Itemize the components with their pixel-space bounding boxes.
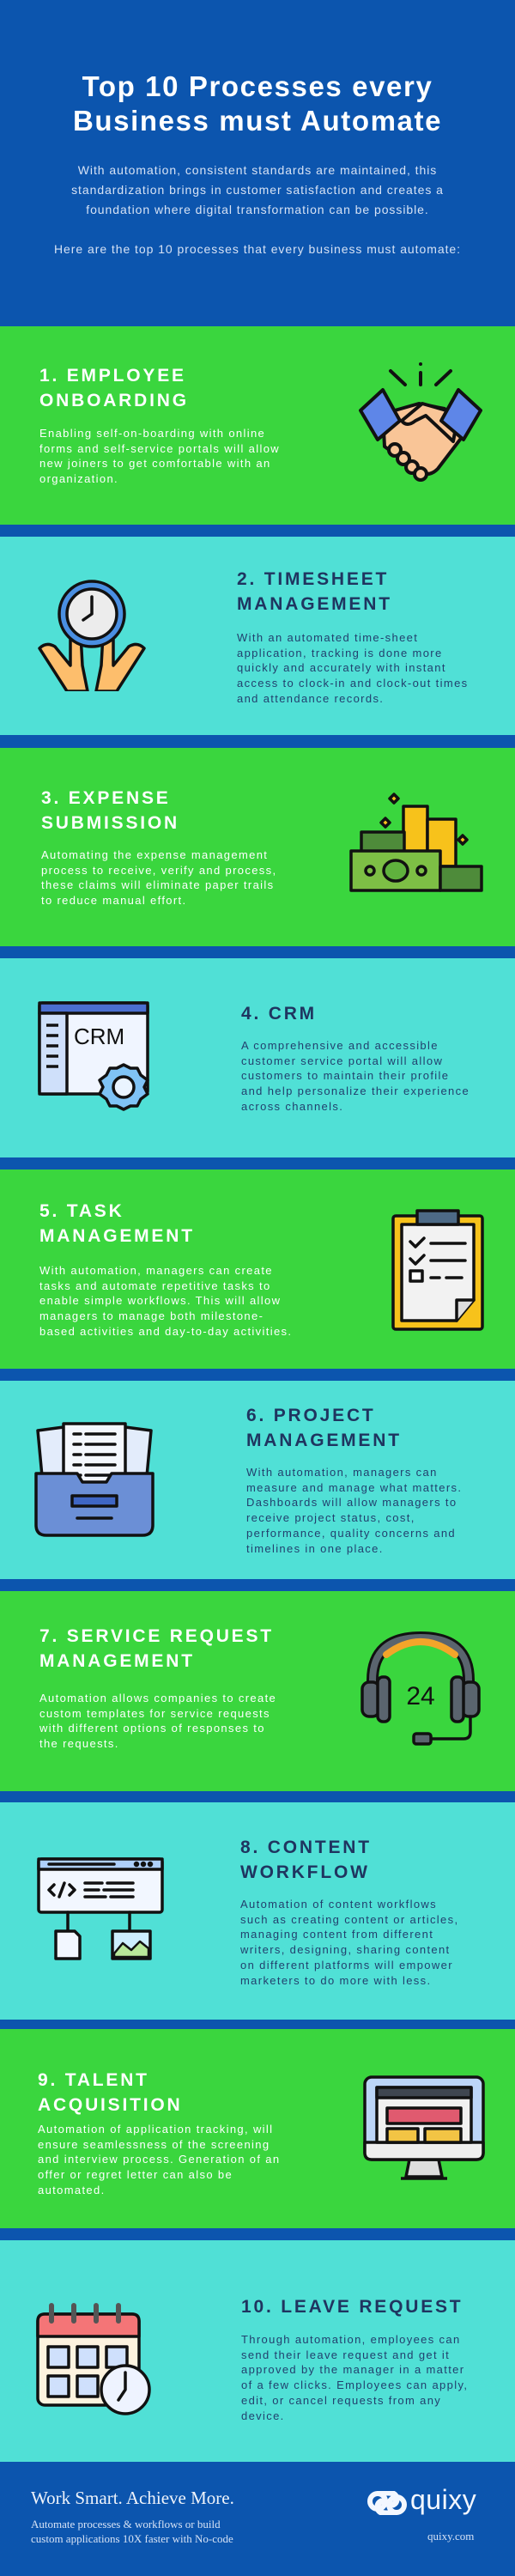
icon: code window with assets	[37, 1857, 164, 1960]
section 8: content workflow	[0, 1802, 515, 2020]
text: approved by the manager in a matter	[241, 2363, 464, 2376]
text: Enabling self-on-boarding with online	[39, 427, 265, 440]
text: Automation of content workflows	[240, 1898, 437, 1911]
text: across channels.	[241, 1100, 343, 1113]
icon: clipboard checklist	[391, 1209, 484, 1331]
icon: clock in hands	[38, 580, 146, 691]
text: receive project status, cost,	[246, 1511, 415, 1524]
icon: monitor	[363, 2075, 485, 2180]
section 6: project management	[0, 1381, 515, 1579]
heading	[39, 366, 189, 410]
section 9: talent acquisition	[0, 2029, 515, 2228]
icon: money and coins	[349, 793, 483, 892]
text: offer or regret letter can also be	[38, 2168, 233, 2181]
text: A comprehensive and accessible	[241, 1039, 439, 1052]
text: organization.	[39, 472, 118, 485]
heading: 9. TALENT	[38, 2070, 149, 2090]
text: ensure seamlessness of the screening	[38, 2138, 270, 2151]
logo: quixy: quixy	[410, 2484, 476, 2515]
icon: handshake	[359, 362, 482, 482]
section 1: employee onboarding	[0, 326, 515, 525]
text: of a few clicks. Employees can apply,	[241, 2379, 468, 2391]
text: access to clock-in and clock-out times	[237, 677, 469, 690]
text: and interview process. Generation of an	[38, 2153, 280, 2166]
heading: MANAGEMENT	[246, 1431, 402, 1450]
intro text: standardization brings in customer satisfaction and creates a	[71, 183, 444, 197]
text	[39, 1692, 276, 1750]
text	[237, 631, 469, 705]
text: based activities and day-to-day activities.	[39, 1325, 292, 1338]
text: Dashboards will allow managers to	[246, 1496, 457, 1509]
heading: SUBMISSION	[41, 813, 179, 833]
text: With automation, managers can	[246, 1466, 438, 1479]
text: send their leave request and get it	[241, 2348, 450, 2361]
section 4: CRM	[0, 958, 515, 1157]
section 3: expense submission	[0, 748, 515, 946]
icon: CRM window	[38, 1001, 149, 1111]
heading: 4. CRM	[241, 1004, 317, 1024]
heading	[246, 1406, 402, 1450]
heading: 6. PROJECT	[246, 1406, 376, 1425]
intro text: foundation where digital transformation can be possible.	[86, 203, 429, 216]
heading: MANAGEMENT	[39, 1651, 195, 1671]
text: With automation, managers can create	[39, 1264, 273, 1277]
heading: WORKFLOW	[240, 1862, 370, 1882]
text: the requests.	[39, 1737, 119, 1750]
text: these claims will eliminate paper trails	[41, 878, 274, 891]
heading: MANAGEMENT	[237, 594, 392, 614]
text	[39, 1264, 292, 1338]
text: and attendance records.	[237, 692, 384, 705]
text: application, tracking is done more	[237, 647, 443, 659]
text: Automation allows companies to create	[39, 1692, 276, 1704]
text: Automating the expense management	[41, 848, 268, 861]
section 5: task management	[0, 1170, 515, 1369]
text: custom templates for service requests	[39, 1707, 270, 1720]
heading: 8. CONTENT	[240, 1838, 372, 1857]
text: edit, or cancel requests from any	[241, 2394, 441, 2407]
icon: 24h headset	[360, 1631, 481, 1746]
text: process to receive, verify and process,	[41, 864, 276, 877]
footer subtext	[31, 2518, 233, 2545]
heading	[41, 788, 179, 833]
text: new joiners to get comfortable with an	[39, 457, 271, 470]
icon: 24h headset: 24	[406, 1682, 435, 1710]
heading: ACQUISITION	[38, 2095, 182, 2115]
footer	[0, 2462, 515, 2576]
text: measure and manage what matters.	[246, 1481, 462, 1494]
heading: 10. LEAVE REQUEST	[241, 2297, 463, 2317]
title: Top 10 Processes every	[82, 70, 433, 102]
heading	[240, 1838, 372, 1882]
text: Through automation, employees can	[241, 2333, 461, 2346]
text: timelines in one place.	[246, 1542, 384, 1555]
text: automated.	[38, 2184, 106, 2196]
text: marketers to do more with less.	[240, 1974, 431, 1987]
text: managing content from different	[240, 1928, 433, 1941]
heading	[38, 2070, 182, 2115]
heading: 1. EMPLOYEE	[39, 366, 186, 386]
text	[39, 427, 280, 485]
text	[241, 2333, 468, 2422]
text: on different platforms will empower	[240, 1959, 453, 1971]
intro text: With automation, consistent standards are maintained, this	[78, 163, 437, 177]
text: Automation of application tracking, will	[38, 2123, 273, 2136]
text: device.	[241, 2409, 285, 2422]
text: customer service portal will allow	[241, 1054, 443, 1067]
heading	[39, 1201, 195, 1246]
icon: document tray	[34, 1422, 154, 1537]
text: such as creating content or articles,	[240, 1913, 458, 1926]
text	[240, 1898, 458, 1987]
text	[38, 2123, 280, 2196]
intro text	[54, 163, 461, 256]
section 7: service request management	[0, 1591, 515, 1791]
intro text: Here are the top 10 processes that every business must automate:	[54, 242, 461, 256]
text	[241, 1039, 470, 1113]
text: With an automated time-sheet	[237, 631, 418, 644]
icon: calendar with clock	[36, 2303, 151, 2415]
title: Business must Automate	[73, 105, 442, 137]
text: and help personalize their experience	[241, 1084, 470, 1097]
text	[41, 848, 276, 907]
heading: 3. EXPENSE	[41, 788, 171, 808]
text: with different options of responses to	[39, 1722, 265, 1735]
heading	[237, 569, 392, 614]
heading: ONBOARDING	[39, 391, 189, 410]
icon: CRM window: CRM	[74, 1024, 124, 1049]
heading: 7. SERVICE REQUEST	[39, 1626, 274, 1646]
title	[73, 70, 442, 137]
header	[0, 0, 515, 326]
text: performance, quality concerns and	[246, 1527, 456, 1540]
text: customers to maintain their profile	[241, 1069, 449, 1082]
text: to reduce manual effort.	[41, 894, 186, 907]
website: quixy.com	[427, 2530, 474, 2543]
tagline: Work Smart. Achieve More.	[31, 2488, 234, 2508]
text: enable simple workflows. This will allow	[39, 1294, 281, 1307]
footer subtext: Automate processes & workflows or build	[31, 2518, 221, 2530]
text	[246, 1466, 462, 1555]
text: quickly and accurately with instant	[237, 661, 446, 674]
heading: 5. TASK	[39, 1201, 124, 1221]
section 2: timesheet management	[0, 537, 515, 735]
section 10: leave request	[0, 2240, 515, 2462]
heading: MANAGEMENT	[39, 1226, 195, 1246]
text: managers to manage both milestone-	[39, 1309, 264, 1322]
heading: 2. TIMESHEET	[237, 569, 389, 589]
footer subtext: custom applications 10X faster with No-code	[31, 2532, 233, 2545]
text: tasks and automate repetitive tasks to	[39, 1279, 271, 1292]
text: forms and self-service portals will allow	[39, 442, 280, 455]
heading	[39, 1626, 274, 1671]
text: writers, designing, sharing content	[240, 1943, 451, 1956]
logo: quixy	[367, 2484, 476, 2515]
